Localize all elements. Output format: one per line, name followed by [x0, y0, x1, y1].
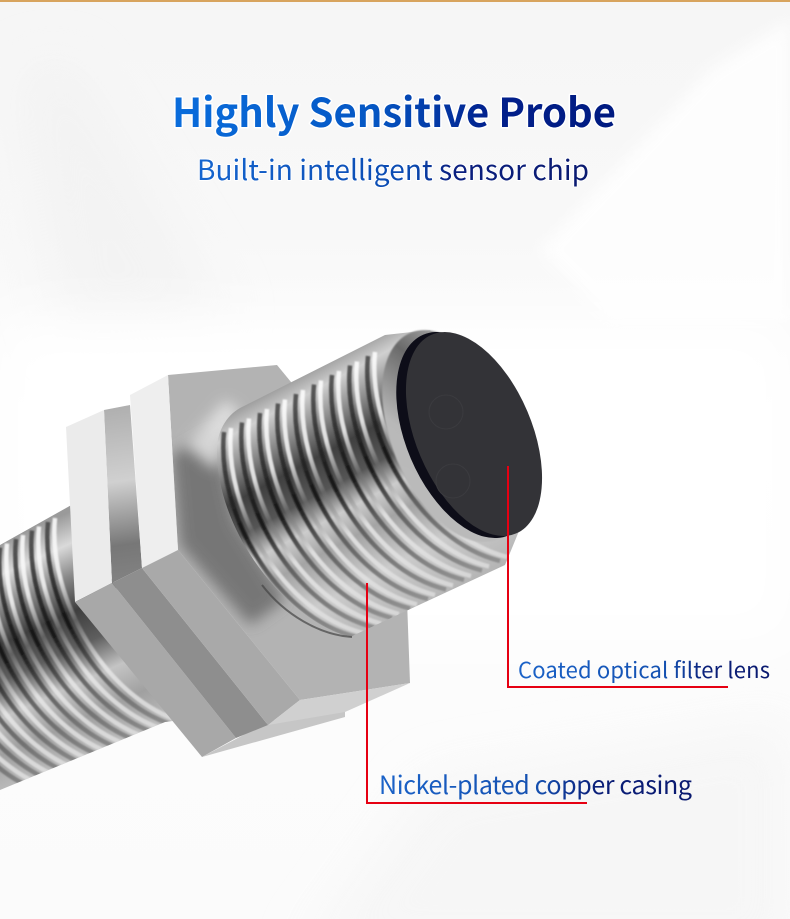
callout line: lens: [508, 466, 728, 687]
callout line: casing: [367, 583, 587, 803]
callout label: lens: Coated optical filter lens: [518, 653, 770, 685]
top edge strip: [0, 0, 790, 2]
rear hex nut: [66, 405, 345, 757]
coated lens face: [378, 312, 570, 556]
seat groove: [262, 585, 352, 637]
front threaded section: [218, 330, 518, 636]
sensor probe illustration: [0, 329, 542, 790]
lens dark bezel: [368, 311, 564, 559]
rear threaded section: [0, 506, 172, 790]
subtitle: Built-in intelligent sensor chip: [197, 149, 589, 189]
callout label: casing: Nickel-plated copper casing: [379, 766, 692, 802]
lens sensor windows: [429, 395, 463, 429]
lens rim: [353, 309, 555, 563]
front hex nut: [130, 365, 410, 725]
title: Highly Sensitive Probe: [172, 81, 616, 139]
